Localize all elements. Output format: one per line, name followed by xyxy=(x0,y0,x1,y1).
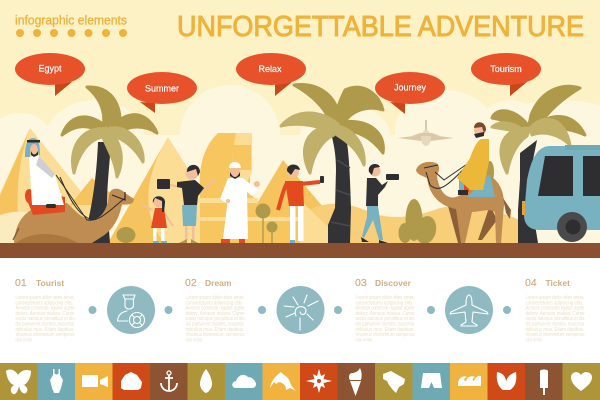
speech bubble: Tourism: Tourism xyxy=(490,64,522,74)
step 02 text: 02 xyxy=(185,277,197,289)
step 01 text: sociis natoque penatibus et dis xyxy=(16,316,75,322)
speech bubble: Egypt: Egypt xyxy=(38,64,62,74)
icon: leaf xyxy=(188,363,225,400)
icon: heart xyxy=(562,363,600,400)
bus xyxy=(522,145,600,242)
step 04 text: dolory. Aenean massa. Cume xyxy=(526,311,585,317)
step 03 text: ridiculus mus. Etiam dapibus. xyxy=(356,327,414,333)
girl xyxy=(142,196,173,243)
step 03 text xyxy=(355,277,415,343)
background xyxy=(0,0,600,260)
camel with rider xyxy=(416,122,511,243)
step 01 text: nisi enim. xyxy=(16,337,34,343)
step 03 text: Discover xyxy=(375,278,412,288)
step 01 text: Vivamus elementum semperus xyxy=(16,332,75,338)
icon: waves xyxy=(450,363,488,400)
clouds xyxy=(0,85,600,243)
step 04 text: nisi enim. xyxy=(526,337,544,343)
icon: swimsuit xyxy=(38,363,75,400)
connector dots xyxy=(88,306,511,314)
step 01 text: Lorem ipsum dolor sites amet, xyxy=(16,295,74,301)
icon: butterfly xyxy=(0,363,38,400)
icon: compass xyxy=(300,363,338,400)
step 04 text xyxy=(525,277,585,343)
step 04 text: Lorem ipsum dolor sites amet, xyxy=(526,295,584,301)
step 02 text xyxy=(185,277,245,343)
ground xyxy=(0,243,600,258)
step 04 text: ridiculus mus. Etiam dapibus. xyxy=(526,327,584,333)
step 01 text: ridiculus mus. Etiam dapibus. xyxy=(16,327,74,333)
icon: tourist xyxy=(107,286,155,334)
man in red xyxy=(278,164,324,243)
step 01 text: Tourist xyxy=(36,278,64,288)
step 03 text: Vivamus elementum semperus xyxy=(356,332,415,338)
arab man xyxy=(220,162,260,243)
step 02 text: dolory. Aenean massa. Cume xyxy=(186,311,245,317)
desert dunes xyxy=(300,204,530,243)
icon: leaves xyxy=(488,363,525,400)
step 02 text: Lorem ipsum dolor sites amet, xyxy=(186,295,244,301)
cactus xyxy=(398,161,494,246)
step 03 text: Aenean commodo ligulae agete xyxy=(356,306,415,312)
step 02 text: Aenean commodo ligulae agete xyxy=(186,306,245,312)
step 02 text: Dream xyxy=(205,278,232,288)
step 04 text: 04 xyxy=(525,277,537,289)
icon: shorts xyxy=(412,363,450,400)
step 01 text: Aenean commodo ligulae agete xyxy=(16,306,75,312)
step 01 text: consectetuers adipiscing elits. xyxy=(16,300,74,306)
icon: map xyxy=(375,363,412,400)
step 02 text: nisi enim. xyxy=(186,337,204,343)
step 01 text: dis parturient montes, nascetur xyxy=(16,322,75,328)
icon strip xyxy=(0,363,600,400)
icon: video camera xyxy=(75,363,112,400)
step 02 text: consectetuers adipiscing elits. xyxy=(186,300,244,306)
step 01 text xyxy=(15,277,75,343)
palm tree left xyxy=(62,87,157,243)
speech bubble: Egypt xyxy=(15,53,85,96)
speech bubble: Relax xyxy=(236,53,306,96)
camel lying xyxy=(13,175,134,243)
icon: shell xyxy=(112,363,150,400)
step 04 text: Aenean commodo ligulae agete xyxy=(526,306,585,312)
subtitle dots xyxy=(16,29,127,37)
photographer xyxy=(361,164,399,243)
icon: ice cream xyxy=(338,363,375,400)
step 01 text: dolory. Aenean massa. Cume xyxy=(16,311,75,317)
speech bubble: Journey xyxy=(375,72,445,114)
boy with tablet xyxy=(157,165,215,243)
step 03 text: sociis natoque penatibus et dis xyxy=(356,316,415,322)
speech bubble: Summer: Summer xyxy=(145,84,179,94)
step 04 text: sociis natoque penatibus et dis xyxy=(526,316,585,322)
pyramids xyxy=(0,128,330,243)
palm tree center xyxy=(281,85,383,243)
plane xyxy=(398,120,454,146)
step 03 text: 03 xyxy=(355,277,367,289)
speech bubble: Summer xyxy=(127,72,197,113)
step 01 text: 01 xyxy=(15,277,27,289)
icon: airplane xyxy=(445,286,493,334)
step 04 text: dis parturient montes, nascetur xyxy=(526,322,585,328)
step 03 text: dis parturient montes, nascetur xyxy=(356,322,415,328)
step 03 text: nisi enim. xyxy=(356,337,374,343)
small trees xyxy=(256,204,278,243)
icon: anchor xyxy=(150,363,188,400)
sphinx xyxy=(198,133,300,243)
step 02 text: dis parturient montes, nascetur xyxy=(186,322,245,328)
step 02 text: ridiculus mus. Etiam dapibus. xyxy=(186,327,244,333)
bush xyxy=(116,227,136,243)
speech bubble: Relax: Relax xyxy=(258,64,282,74)
icon: dolphin xyxy=(262,363,300,400)
step 03 text: consectetuers adipiscing elits. xyxy=(356,300,414,306)
step 04 text: Ticket xyxy=(546,278,570,288)
speech bubble: Journey: Journey xyxy=(394,82,427,92)
icon: popsicle xyxy=(525,363,562,400)
step 04 text: consectetuers adipiscing elits. xyxy=(526,300,584,306)
speech bubble: Tourism xyxy=(471,53,541,96)
step 04 text: Vivamus elementum semperus xyxy=(526,332,585,338)
rider egypt xyxy=(25,138,65,215)
palm tree right xyxy=(492,86,585,243)
step 02 text: Vivamus elementum semperus xyxy=(186,332,245,338)
subtitle: infographic elements xyxy=(15,14,127,28)
icon: cloud xyxy=(225,363,262,400)
step 03 text: dolory. Aenean massa. Cume xyxy=(356,311,415,317)
step 02 text: sociis natoque penatibus et dis xyxy=(186,316,245,322)
icon: sun xyxy=(276,286,324,334)
step 03 text: Lorem ipsum dolor sites amet, xyxy=(356,295,414,301)
